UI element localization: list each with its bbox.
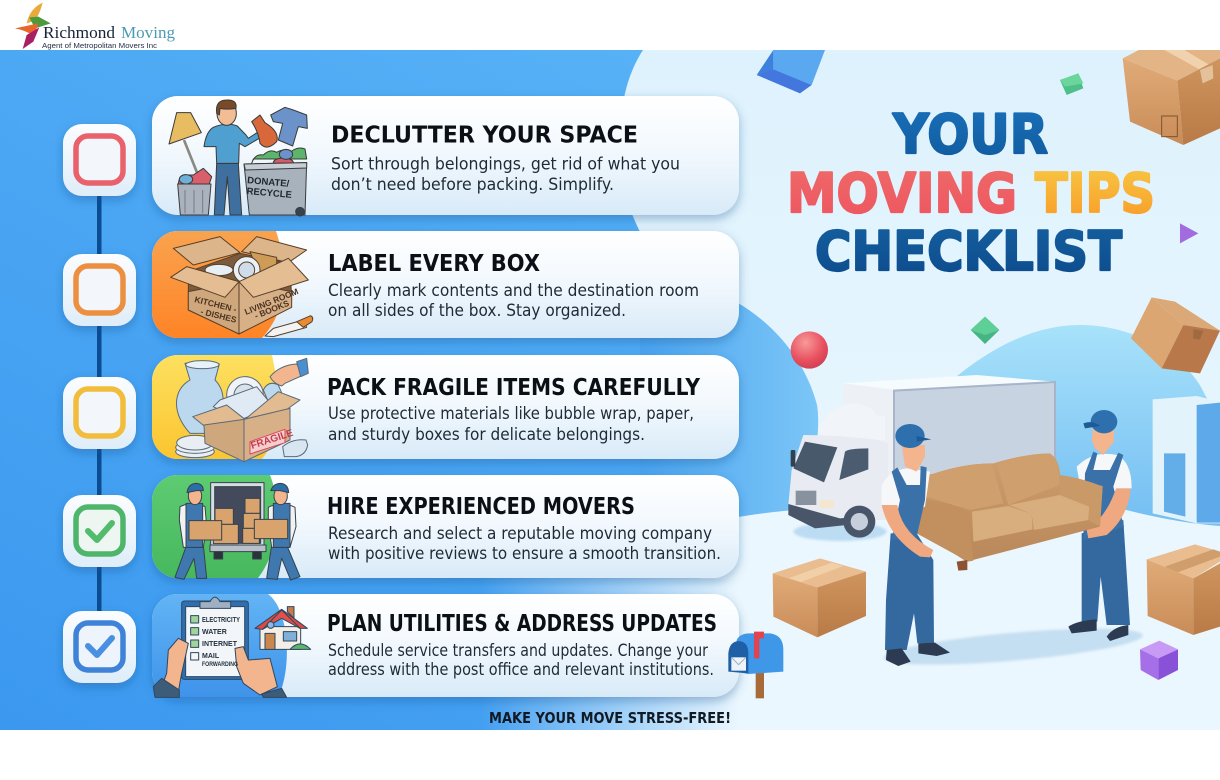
icon: purple cube xyxy=(1140,641,1178,680)
checkbox 1 red xyxy=(63,124,136,196)
icon: blue cube xyxy=(757,50,825,93)
icon: green cube xyxy=(1060,73,1083,95)
logo xyxy=(15,3,175,50)
body text: with positive reviews to ensure a smooth transition. xyxy=(328,544,721,564)
clipboard list xyxy=(202,617,240,668)
panel: hire experienced movers xyxy=(152,475,739,580)
checkbox 5 blue checked xyxy=(63,611,136,683)
body text xyxy=(328,524,721,564)
icon: purple triangle xyxy=(1180,223,1198,243)
heading: DECLUTTER YOUR SPACE xyxy=(331,122,638,148)
title: TIPS xyxy=(1035,162,1155,225)
icon: box right xyxy=(1147,544,1220,635)
logo name xyxy=(43,23,175,42)
body text: Sort through belongings, get rid of what you xyxy=(331,154,680,174)
sofa xyxy=(917,453,1103,571)
panel: plan utilities and address updates xyxy=(152,594,739,697)
body text xyxy=(328,404,694,445)
white band bottom xyxy=(0,730,1220,780)
heading: LABEL EVERY BOX xyxy=(328,251,540,277)
body text: on all sides of the box. Stay organized. xyxy=(328,301,626,321)
title: CHECKLIST xyxy=(815,220,1122,283)
body text: Clearly mark contents and the destination room xyxy=(328,281,699,301)
checkbox 2 orange xyxy=(63,254,136,326)
illustration: movers carrying sofa xyxy=(882,410,1144,672)
body text: and sturdy boxes for delicate belongings. xyxy=(328,425,645,445)
body text: Research and select a reputable moving company xyxy=(328,524,712,544)
body text: don’t need before packing. Simplify. xyxy=(331,175,614,195)
icon: green diamond xyxy=(971,317,999,344)
tagline: MAKE YOUR MOVE STRESS-FREE! xyxy=(489,709,731,727)
fragile label: FRAGILE xyxy=(250,428,295,452)
clipboard list: ELECTRICITY xyxy=(202,617,240,624)
logo tagline: Agent of Metropolitan Movers Inc xyxy=(42,41,157,50)
label: donate recycle: DONATE/ xyxy=(247,175,290,190)
box label text: - DISHES xyxy=(200,306,238,325)
body text: Use protective materials like bubble wrap, paper, xyxy=(328,404,694,424)
icon: movers with boxes and truck xyxy=(175,483,300,580)
decorative floating shapes xyxy=(757,50,1198,369)
title: MOVING xyxy=(787,162,1017,225)
icon: logo mark xyxy=(15,3,51,49)
body text: Schedule service transfers and updates. Change your xyxy=(328,641,708,661)
heading: PACK FRAGILE ITEMS CAREFULLY xyxy=(327,375,700,401)
illustration: moving truck xyxy=(788,375,1055,541)
illustration: floor boxes xyxy=(773,544,1220,680)
icon: box left xyxy=(773,558,866,637)
box label text: - BOOKS xyxy=(253,298,291,321)
panel: pack fragile items carefully xyxy=(152,355,739,462)
body text xyxy=(331,154,680,195)
heading: HIRE EXPERIENCED MOVERS xyxy=(327,494,635,520)
logo name: Moving xyxy=(121,23,175,42)
left worker xyxy=(882,424,950,666)
clipboard list: INTERNET xyxy=(202,641,238,648)
panel: label every box xyxy=(152,231,739,338)
illustration: building xyxy=(1153,396,1220,523)
icon: man with lamp, trash can and donate bin xyxy=(169,100,307,216)
right worker xyxy=(1068,410,1132,641)
panel: declutter your space: RECYCLE xyxy=(246,186,292,201)
box label text: KITCHEN - xyxy=(194,294,238,314)
body text: address with the post office and relevant institutions. xyxy=(328,660,714,680)
box label text xyxy=(194,286,300,325)
timeline connector xyxy=(97,190,102,615)
clipboard list: WATER xyxy=(202,629,227,636)
checkbox 4 green checked xyxy=(63,495,136,567)
clipboard list: MAIL xyxy=(202,653,220,660)
box label text: LIVING ROOM xyxy=(243,286,300,317)
icon: mailbox xyxy=(728,632,783,698)
panel: declutter your space xyxy=(152,96,739,216)
icon: top right box xyxy=(1123,49,1220,145)
white band top xyxy=(0,0,1220,50)
heading: PLAN UTILITIES & ADDRESS UPDATES xyxy=(327,611,717,637)
icon: open labelled box with marker xyxy=(171,237,313,337)
icon: tumbling box right xyxy=(1131,297,1220,373)
icon: vase, plates, fragile box and hand xyxy=(176,358,308,462)
checkbox 3 yellow xyxy=(63,377,136,449)
logo name: Richmond xyxy=(43,23,115,42)
clipboard list: FORWARDING xyxy=(202,662,238,668)
body text xyxy=(328,281,699,321)
icon: clipboard held in hands and house xyxy=(153,597,311,697)
icon: red ball xyxy=(791,331,828,369)
body text xyxy=(328,641,714,680)
title xyxy=(787,103,1155,283)
title: YOUR xyxy=(892,103,1048,166)
